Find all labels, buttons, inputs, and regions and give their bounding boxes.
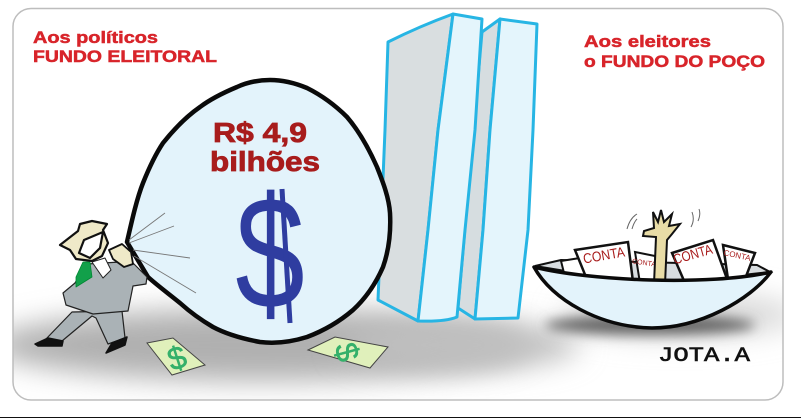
bowl inner back	[535, 260, 770, 285]
tie	[76, 262, 92, 287]
conta bill 3	[671, 240, 727, 283]
bill small back	[561, 258, 590, 280]
bank note left	[147, 338, 205, 378]
bank note right: $	[327, 339, 367, 365]
heading: aos políticos: Aos políticos	[33, 29, 158, 47]
collar	[92, 258, 111, 278]
bottom edge line	[0, 417, 801, 418]
bank note left: $	[163, 338, 191, 378]
politician	[35, 213, 196, 353]
heading: aos eleitores: o FUNDO DO POÇO	[584, 53, 765, 71]
air lines	[129, 213, 196, 293]
conta bill 1: CONTA	[582, 243, 626, 267]
head	[60, 221, 108, 261]
conta bill 4: CONTA	[723, 248, 752, 263]
bag amount text: bilhões	[210, 146, 320, 177]
torso and arm	[63, 262, 147, 314]
conta bill 4	[723, 245, 755, 279]
bowl body	[534, 267, 771, 328]
bank note right	[308, 337, 388, 368]
ground shadows	[0, 293, 800, 381]
arm and hand	[643, 210, 680, 284]
conta bill 1	[575, 242, 633, 282]
motion lines	[627, 209, 700, 229]
legs	[46, 311, 125, 344]
heading: aos políticos: FUNDO ELEITORAL	[33, 48, 217, 66]
conta bill 2: CONTA	[632, 258, 657, 269]
hand	[109, 244, 133, 267]
grin	[79, 232, 103, 258]
shoes	[35, 337, 127, 353]
signature: JOTA.A	[658, 345, 750, 368]
bag amount text: R$ 4,9	[213, 117, 307, 148]
dollar sign: $	[235, 164, 305, 343]
right tower	[458, 19, 537, 319]
heading: aos eleitores: Aos eleitores	[584, 33, 711, 51]
bowl with bills	[534, 209, 771, 328]
conta bill 3: CONTA	[671, 241, 715, 267]
conta bill 2	[632, 252, 660, 283]
congress towers	[378, 14, 537, 321]
left tower	[378, 14, 482, 321]
money bag	[127, 80, 390, 343]
